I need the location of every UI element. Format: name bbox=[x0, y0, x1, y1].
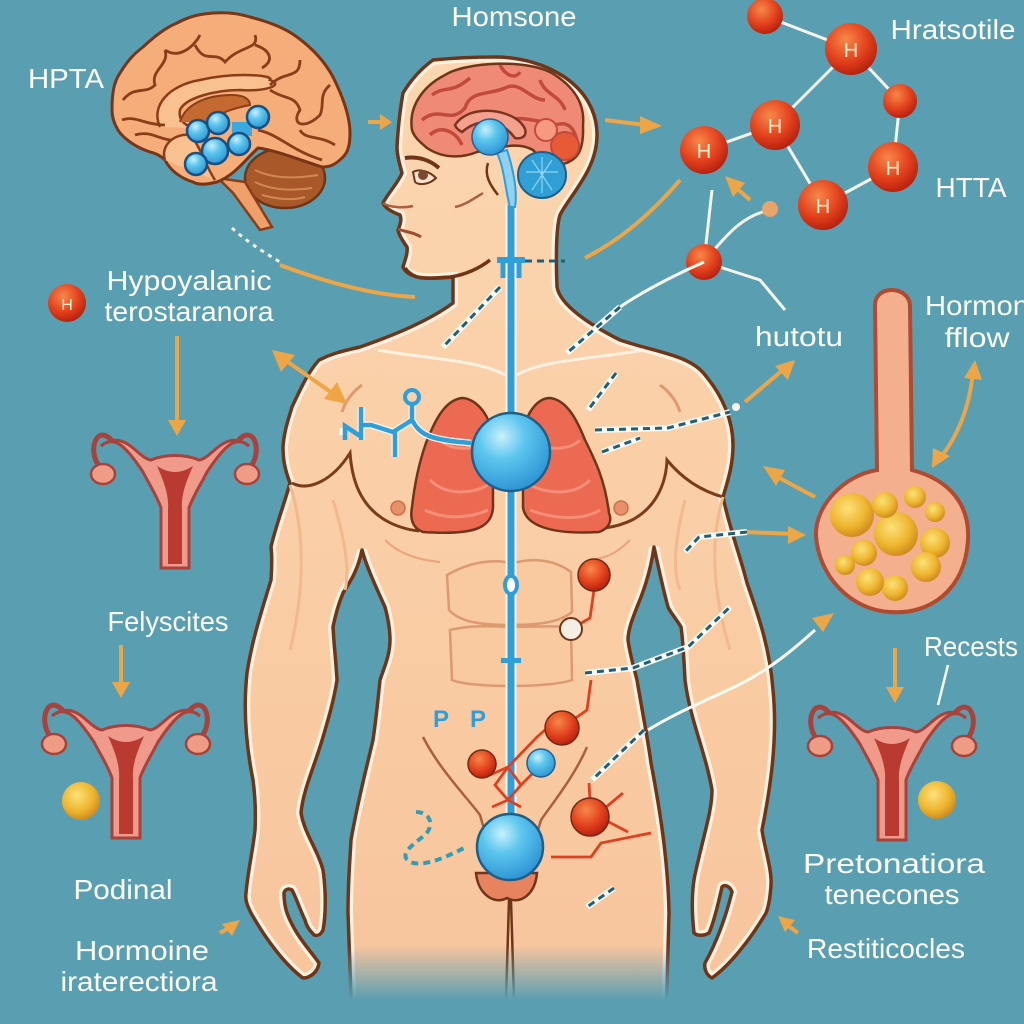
bottom fade bbox=[340, 945, 680, 1000]
label: Pretonatiora tenecones bbox=[803, 848, 985, 910]
head details bbox=[383, 157, 498, 278]
brain illustration bbox=[112, 13, 350, 230]
orange arrows bbox=[112, 114, 982, 936]
red hormone marker: H bbox=[61, 297, 73, 314]
label: Hormone top: Homsone bbox=[452, 1, 576, 32]
blue dashed squiggle bbox=[405, 812, 466, 864]
letters P P exclamation bbox=[433, 706, 515, 740]
gold sphere left bbox=[62, 782, 100, 820]
red molecules on body bbox=[468, 559, 651, 857]
label: Hratsotile: Hratsotile bbox=[890, 14, 1016, 45]
muscle lines bbox=[292, 453, 723, 531]
brain in head bbox=[411, 64, 583, 164]
uterus right bbox=[808, 707, 976, 840]
label: Hypoyalanic terostaranora: terostaranora bbox=[104, 296, 274, 327]
human body figure bbox=[245, 57, 775, 1024]
leg gap bbox=[506, 900, 514, 1000]
red hormone marker bbox=[48, 284, 86, 322]
molecule network: H bbox=[886, 158, 900, 180]
label: HTTA: HTTA bbox=[936, 172, 1007, 203]
letters P P exclamation: P bbox=[433, 706, 449, 733]
label: Hormon fflow: Hormon bbox=[925, 290, 1024, 321]
label: Restiticocles: Restiticocles bbox=[807, 933, 965, 964]
label: Hypoyalanic terostaranora bbox=[104, 265, 274, 327]
label: Hormoine iraterectiora: iraterectiora bbox=[60, 966, 218, 997]
label: hutotu: hutotu bbox=[755, 321, 843, 352]
label: Hormoine iraterectiora: Hormoine bbox=[75, 935, 209, 966]
label: Hypoyalanic terostaranora: Hypoyalanic bbox=[106, 265, 272, 296]
label: Podinal: Podinal bbox=[74, 874, 172, 905]
molecule network: H bbox=[816, 196, 830, 218]
spine tick bbox=[501, 658, 521, 663]
molecule network: H bbox=[844, 40, 858, 62]
letters P P exclamation: ! bbox=[507, 710, 515, 740]
central blue line bbox=[497, 150, 525, 850]
label: Pretonatiora tenecones: tenecones bbox=[824, 879, 960, 910]
label: Hormon fflow bbox=[925, 290, 1024, 353]
blue markers on spine bbox=[505, 576, 517, 594]
label: Felyscites: Felyscites bbox=[108, 606, 228, 637]
gold sphere right bbox=[918, 781, 956, 819]
molecule network: H bbox=[697, 141, 711, 163]
label: Hormon fflow: fflow bbox=[944, 322, 1010, 353]
label: Pretonatiora tenecones: Pretonatiora bbox=[803, 848, 985, 879]
label: HPTA top left: HPTA bbox=[28, 63, 104, 94]
blue spheres bbox=[472, 119, 566, 900]
molecule network: H bbox=[768, 116, 782, 138]
molecule network bbox=[680, 0, 918, 310]
letters P P exclamation: P bbox=[470, 706, 486, 733]
label: Recests: Recests bbox=[924, 631, 1018, 662]
uterus top left bbox=[91, 435, 259, 568]
label: Hormoine iraterectiora bbox=[60, 935, 218, 997]
lungs bbox=[411, 398, 610, 533]
uterus middle left bbox=[42, 705, 210, 838]
abs bbox=[447, 560, 572, 686]
white and dashed leader lines bbox=[232, 228, 948, 907]
bottom band bbox=[340, 1000, 680, 1024]
blue molecule chain bbox=[343, 390, 471, 457]
flask organ with gold spheres bbox=[816, 290, 968, 612]
